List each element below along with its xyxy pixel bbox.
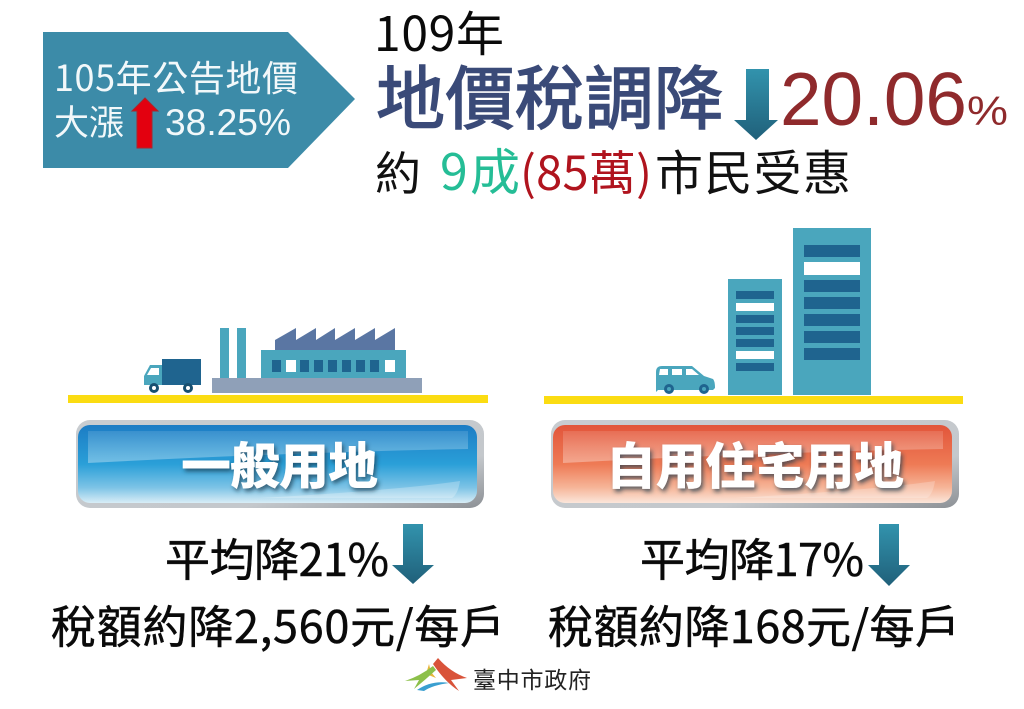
icon: large down arrow	[734, 69, 778, 140]
subtitle: beneficiaries: 市民受惠	[655, 134, 851, 204]
subtitle: beneficiaries: 約	[375, 138, 421, 204]
button: owner-occupied residential land	[551, 420, 959, 508]
icon: truck	[144, 359, 201, 393]
logo: Taichung City Government	[405, 658, 591, 695]
icon: small building	[728, 279, 782, 395]
icon: tall building	[793, 228, 871, 395]
button: general land: 一般用地	[181, 427, 378, 499]
title: land value tax reduction: 地價稅調降	[376, 43, 723, 143]
callout: 105 announced land value arrow	[43, 32, 355, 168]
text block: general land reduction: 平均降21%	[165, 524, 389, 589]
callout: 105 announced land value arrow: 大漲	[54, 95, 124, 146]
figure: 20.06 percent: 20.06	[780, 57, 967, 141]
text block: residential land reduction	[548, 524, 960, 656]
callout: 105 announced land value arrow: 105年公告地價	[54, 50, 298, 102]
callout: 105 announced land value arrow: 38.25%	[165, 102, 291, 143]
text block: general land reduction: 稅額約降2,560元/每戶	[51, 591, 505, 656]
icon: down arrow left	[392, 524, 434, 584]
ground line: right	[544, 396, 963, 404]
text block: residential land reduction: 稅額約降168元/每戶	[548, 591, 960, 656]
icon: down arrow right	[868, 524, 910, 586]
ground line: left	[68, 395, 488, 403]
logo: Taichung City Government: 臺中市政府	[473, 661, 591, 695]
subtitle: beneficiaries: (85萬)	[520, 135, 652, 204]
button: owner-occupied residential land: 自用住宅用地	[606, 427, 904, 499]
text block: residential land reduction: 平均降17%	[640, 524, 864, 589]
subtitle: beneficiaries	[375, 133, 851, 205]
figure: 20.06 percent: %	[967, 88, 1008, 134]
icon: red up arrow	[132, 98, 158, 148]
text block: general land reduction	[51, 524, 505, 656]
icon: factory	[212, 328, 422, 393]
button: general land	[76, 420, 484, 508]
subtitle: beneficiaries: 9成	[440, 133, 520, 205]
icon: van	[656, 366, 715, 394]
